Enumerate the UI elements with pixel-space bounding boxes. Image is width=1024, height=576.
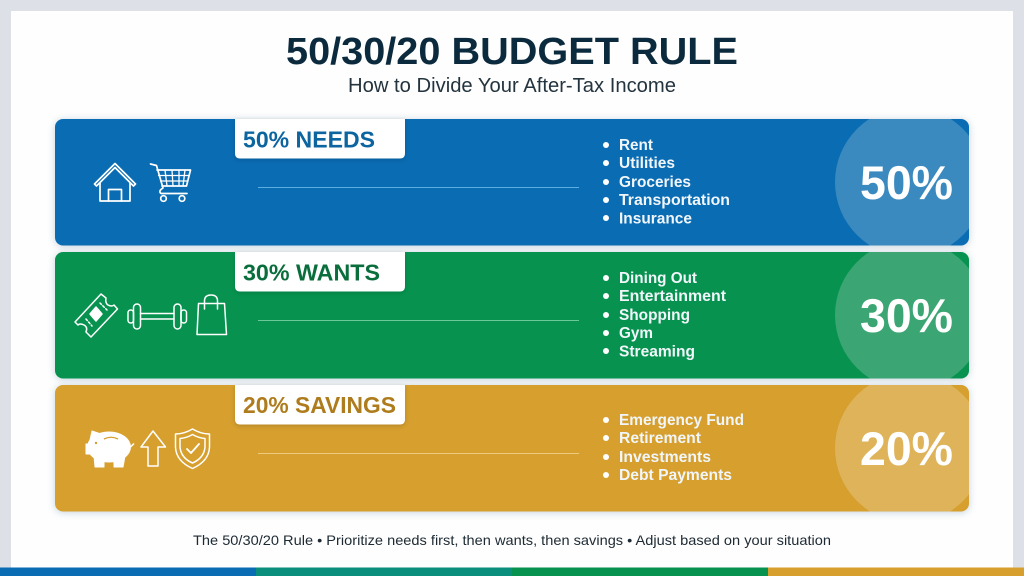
footer note: The 50/30/20 Rule • Prioritize needs first, then wants, then savings • Adjust based on your situation (193, 532, 831, 548)
percent: 20: 20% (860, 422, 953, 475)
tab: needs label (235, 119, 405, 158)
percent circle: savings (835, 385, 969, 512)
icon: shopping bag (197, 295, 226, 334)
list: savings items: Investments (619, 449, 711, 466)
list: savings items: Emergency Fund (619, 412, 744, 429)
list: wants items (603, 270, 726, 360)
bottom color strip (0, 568, 1024, 576)
list: wants items: Streaming (619, 344, 695, 360)
icon: shield with check (176, 429, 210, 468)
tab: wants label: 30% WANTS (243, 260, 380, 286)
panel: savings (51, 382, 973, 516)
icon: dumbbell (128, 304, 186, 329)
list: needs items: Transportation (619, 192, 730, 209)
divider line (258, 453, 579, 454)
list: savings items (603, 412, 744, 484)
percent: 30: 30% (860, 289, 953, 342)
list: needs items: Insurance (619, 210, 692, 228)
icon: house (94, 164, 136, 201)
divider line (258, 320, 579, 321)
tab: wants label (235, 252, 405, 292)
list: needs items (603, 137, 730, 228)
list: wants items: Entertainment (619, 288, 726, 305)
icon: piggy bank (86, 431, 134, 467)
icon: shopping cart (150, 164, 190, 201)
divider line (258, 187, 579, 188)
icon: up arrow (141, 431, 166, 466)
percent: 50: 50% (860, 156, 953, 209)
list: wants items: Dining Out (619, 270, 697, 287)
list: needs items: Utilities (619, 155, 675, 172)
panel: needs (51, 116, 973, 250)
list: needs items: Rent (619, 137, 653, 154)
percent circle: needs (835, 119, 969, 246)
panel: wants (51, 249, 973, 384)
subtitle: How to Divide Your After-Tax Income (348, 75, 676, 97)
percent circle: wants (835, 252, 969, 378)
list: savings items: Debt Payments (619, 467, 732, 484)
title: 50/30/20 BUDGET RULE (286, 31, 738, 73)
list: wants items: Shopping (619, 307, 690, 324)
tab: savings label: 20% SAVINGS (243, 392, 396, 418)
icon: ticket (75, 294, 118, 337)
list: savings items: Retirement (619, 430, 701, 447)
list: needs items: Groceries (619, 174, 691, 191)
tab: needs label: 50% NEEDS (243, 126, 375, 152)
tab: savings label (235, 385, 405, 424)
list: wants items: Gym (619, 325, 653, 342)
